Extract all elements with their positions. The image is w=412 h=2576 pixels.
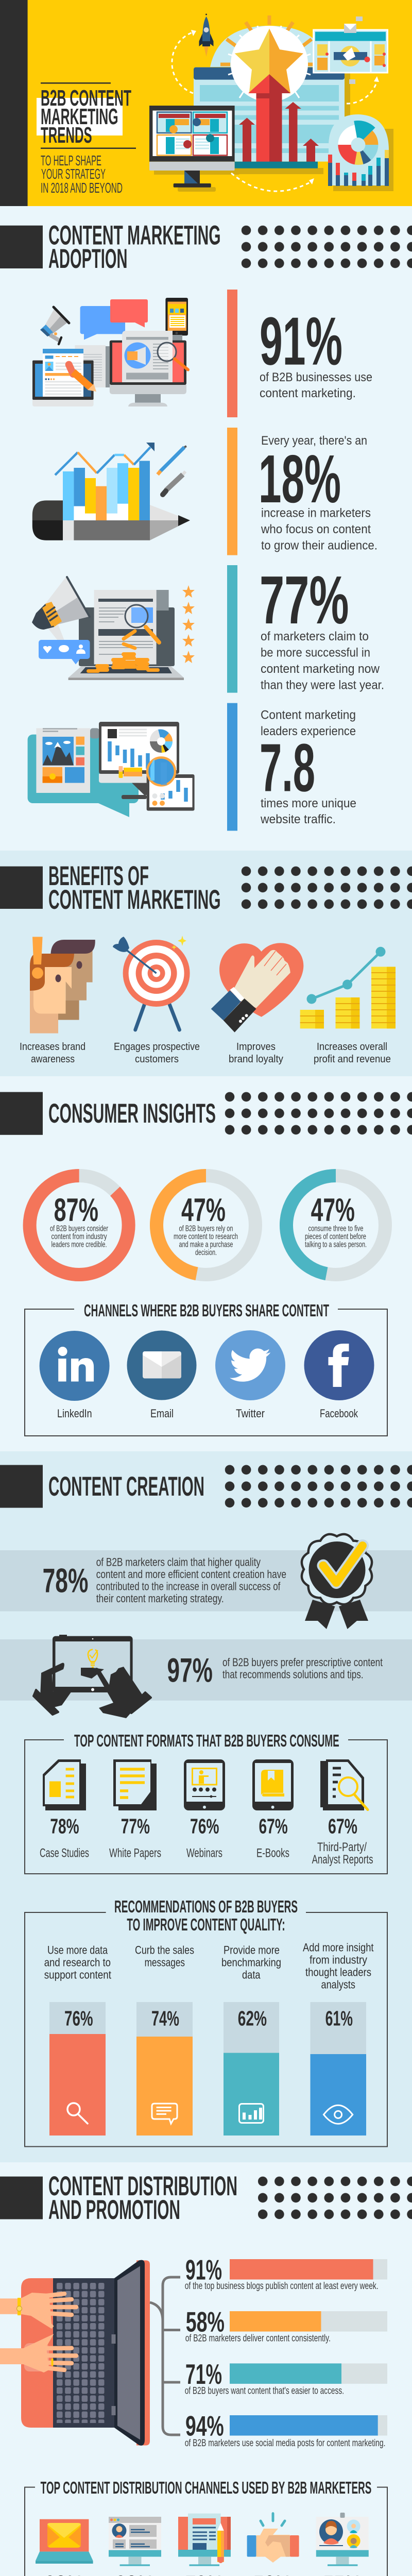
channel: social media posts xyxy=(109,2517,161,2576)
icon: target with dart xyxy=(113,936,190,1030)
format: analyst reports: Third-Party/ xyxy=(317,1840,367,1854)
stat bar: 91 percent: 91% xyxy=(185,2253,222,2285)
panel: adoption stat 7.8 xyxy=(28,703,356,831)
donut: 47 percent pieces of content: 47% xyxy=(311,1192,355,1228)
section heading: content marketing adoption xyxy=(0,221,412,274)
stat bar: 58 percent: 58% xyxy=(186,2306,225,2337)
hero illustration xyxy=(149,13,393,192)
stat text: 18% xyxy=(259,441,341,517)
format: case studies xyxy=(40,1759,89,1860)
description: of B2B marketers claim that higher quality xyxy=(96,1556,261,1568)
panel: recommendations of B2B buyers xyxy=(25,1897,387,2146)
section heading: content distribution and promotion xyxy=(0,2171,412,2225)
caption: customers xyxy=(135,1054,179,1065)
format: case studies: Case Studies xyxy=(40,1846,89,1860)
panel: engages prospective customers xyxy=(113,936,200,1065)
icon: hands on tablet xyxy=(33,1635,151,1718)
icon: Email: Email xyxy=(150,1407,174,1420)
stat value: 77% xyxy=(260,562,349,638)
recommendation: curb sales: Curb the sales xyxy=(135,1944,194,1957)
hero title block: MARKETING xyxy=(41,104,118,129)
channel: webinars and virtual events xyxy=(316,2513,369,2576)
format: e-books: E-Books xyxy=(256,1846,289,1860)
panel: 78 percent higher quality xyxy=(0,1534,412,1629)
recommendation: more data: 76% xyxy=(64,2006,93,2030)
section heading: benefits of content marketing: BENEFITS OF xyxy=(48,861,149,891)
recommendation: more data: Use more data xyxy=(47,1944,108,1957)
stat text: Every year, there's an xyxy=(261,434,367,448)
stat text xyxy=(260,708,356,826)
panel: increases overall profit and revenue xyxy=(300,947,396,1065)
panel: 97 percent prescriptive content xyxy=(0,1635,412,1718)
hero title block: TO HELP SHAPE xyxy=(41,152,101,168)
hero title block: IN 2018 AND BEYOND xyxy=(41,180,123,196)
caption: brand loyalty xyxy=(229,1054,283,1065)
stat description xyxy=(260,370,372,400)
stat description: be more successful in xyxy=(261,646,370,660)
stat bar: 94 percent xyxy=(185,2410,387,2449)
section heading: content distribution and promotion: CONTENT DISTRIBUTION xyxy=(48,2171,237,2201)
panel: top content formats xyxy=(25,1731,387,1874)
section heading: content distribution and promotion: AND PROMOTION xyxy=(48,2195,180,2225)
format: e-books: 67% xyxy=(259,1814,288,1838)
recommendation: benchmarking: benchmarking xyxy=(221,1956,281,1969)
icon: LinkedIn xyxy=(40,1331,110,1420)
donut: 47 percent pieces of content: pieces of content before xyxy=(305,1232,366,1241)
caption: awareness xyxy=(31,1054,75,1065)
panel: adoption stat 91% xyxy=(32,290,372,417)
format: analyst reports: Analyst Reports xyxy=(312,1853,373,1867)
recommendation: curb sales: messages xyxy=(145,1956,185,1969)
icon: Twitter: Twitter xyxy=(236,1407,265,1420)
illustration: laptop, megaphone and coins xyxy=(32,577,195,680)
caption: Increases brand xyxy=(20,1041,85,1053)
illustration: pencil chart xyxy=(32,443,190,540)
donut: 47 percent pieces of content: talking to a sales person. xyxy=(305,1241,367,1249)
section heading: content creation: CONTENT CREATION xyxy=(48,1471,204,1502)
panel title xyxy=(114,1897,298,1934)
donut: 47 percent pieces of content xyxy=(286,1176,385,1275)
stat text: times more unique xyxy=(261,796,356,810)
panel: top content distribution channels xyxy=(25,2478,387,2576)
stat description: of B2B businesses use xyxy=(260,370,372,384)
recommendation: more data: and research to xyxy=(44,1956,111,1969)
format: analyst reports xyxy=(312,1759,373,1867)
stat description: of marketers claim to xyxy=(261,630,369,643)
recommendation: thought leaders: 61% xyxy=(325,2006,353,2030)
section heading: consumer insights xyxy=(0,1092,412,1135)
stat description: content marketing. xyxy=(260,386,356,400)
stat bar: 58 percent xyxy=(185,2306,387,2344)
recommendation: benchmarking: 62% xyxy=(238,2006,267,2030)
icon: Facebook: Facebook xyxy=(320,1407,358,1420)
donut: 47 percent pieces of content: consume three to five xyxy=(308,1224,364,1233)
hero title block: TRENDS xyxy=(41,123,92,148)
illustration: laptop with typing hands xyxy=(0,2260,150,2446)
caption xyxy=(114,1041,200,1065)
description: that recommends solutions and tips. xyxy=(222,1668,364,1681)
description xyxy=(222,1656,383,1681)
icon: award badge with check xyxy=(302,1534,372,1629)
format: case studies: 78% xyxy=(50,1814,79,1838)
panel: adoption stat 18% xyxy=(32,428,377,555)
stat text: website traffic. xyxy=(260,812,336,826)
stat bar: 58 percent: of B2B marketers deliver content consistently. xyxy=(185,2333,331,2344)
recommendation: benchmarking: data xyxy=(242,1969,261,1981)
stat text: Content marketing xyxy=(261,708,356,722)
section heading: benefits of content marketing: CONTENT MARKETING xyxy=(48,885,221,915)
rocket icon xyxy=(199,13,213,57)
recommendation: thought leaders: from industry xyxy=(310,1954,367,1966)
icon: LinkedIn: LinkedIn xyxy=(57,1407,92,1420)
donut: 87 percent xyxy=(30,1176,129,1275)
pie and bar chart xyxy=(328,114,389,186)
recommendation: more data: support content xyxy=(44,1969,111,1981)
channel: blogs xyxy=(178,2514,231,2576)
panel: 97 percent prescriptive content: 97% xyxy=(167,1651,213,1689)
description: their content marketing strategy. xyxy=(96,1592,224,1605)
stat text: 7.8 xyxy=(260,730,315,806)
format: webinars: Webinars xyxy=(186,1846,222,1860)
channel: e-mail xyxy=(36,2519,93,2576)
icon: coin stacks with growth line xyxy=(300,947,396,1028)
stat description xyxy=(261,630,384,692)
illustration: speech bubble and analytics xyxy=(28,722,195,817)
format: white papers xyxy=(109,1759,161,1860)
donut: 87 percent: content from industry xyxy=(52,1232,107,1241)
stat value: 91% xyxy=(260,303,342,379)
recommendation: curb sales: 74% xyxy=(151,2006,179,2030)
donut: 47 percent research: of B2B buyers rely on xyxy=(179,1224,233,1233)
recommendation: benchmarking xyxy=(221,1944,281,2136)
panel: 78 percent higher quality: 78% xyxy=(43,1561,88,1599)
recommendation: curb sales xyxy=(135,1944,194,2136)
icon: Facebook xyxy=(304,1330,374,1420)
hero title block: YOUR STRATEGY xyxy=(41,166,106,182)
connector lines xyxy=(150,2277,180,2435)
donut: 87 percent: of B2B buyers consider xyxy=(50,1224,108,1233)
stat bar: 94 percent: 94% xyxy=(185,2410,224,2442)
panel: channels where B2B buyers share content xyxy=(25,1301,387,1436)
stat bar: 71 percent: of B2B buyers want content that's easier to access. xyxy=(185,2385,344,2396)
illustration: content devices xyxy=(32,298,188,406)
panel: increases brand awareness xyxy=(20,937,95,1065)
donut: 47 percent research: decision. xyxy=(195,1248,217,1257)
donut: 47 percent research xyxy=(157,1176,255,1275)
format: e-books xyxy=(252,1759,294,1860)
stat text: increase in marketers xyxy=(261,506,371,520)
stat description: content marketing now xyxy=(261,662,380,676)
channel: in-person events xyxy=(247,2514,299,2576)
description xyxy=(96,1556,286,1605)
recommendation: thought leaders: analysts xyxy=(321,1978,355,1991)
format: analyst reports: 67% xyxy=(328,1814,357,1838)
icon: two faces xyxy=(30,937,95,1033)
section heading: content creation xyxy=(0,1465,412,1508)
stat text: leaders experience xyxy=(261,724,356,738)
caption xyxy=(314,1041,391,1065)
caption: profit and revenue xyxy=(314,1054,391,1065)
recommendation: benchmarking: Provide more xyxy=(224,1944,280,1957)
icon: Email xyxy=(127,1330,197,1420)
caption xyxy=(20,1041,85,1065)
recommendation: more data xyxy=(44,1944,111,2136)
format: webinars: 76% xyxy=(190,1814,219,1838)
donut: 47 percent research: more content to research xyxy=(174,1232,238,1241)
caption xyxy=(229,1041,283,1065)
stat text xyxy=(259,434,377,552)
panel: adoption stat 77% xyxy=(32,562,384,693)
panel title: TO IMPROVE CONTENT QUALITY: xyxy=(127,1915,285,1934)
recommendation: thought leaders: thought leaders xyxy=(305,1966,371,1978)
caption: Increases overall xyxy=(317,1041,387,1053)
hands xyxy=(0,2293,76,2372)
description: contributed to the increase in overall success of xyxy=(96,1580,281,1593)
stat text: who focus on content xyxy=(261,522,371,536)
stat bar: 91 percent xyxy=(185,2253,387,2292)
description: content and more efficient content creation have xyxy=(96,1568,286,1581)
caption: Engages prospective xyxy=(114,1041,200,1053)
stat description: than they were last year. xyxy=(261,679,384,692)
stat text: to grow their audience. xyxy=(261,539,377,552)
format: white papers: 77% xyxy=(121,1814,150,1838)
analytics window xyxy=(314,16,387,84)
recommendation: thought leaders xyxy=(303,1941,374,2136)
donut: 47 percent research: and make a purchase xyxy=(179,1241,233,1249)
icon: hand on heart xyxy=(211,943,303,1032)
donut: 87 percent: leaders more credible. xyxy=(52,1241,107,1249)
icon: Twitter xyxy=(215,1330,285,1420)
caption: Improves xyxy=(236,1041,276,1053)
section heading: content marketing adoption: ADOPTION xyxy=(48,244,128,274)
hero banner xyxy=(0,0,412,206)
hero title block xyxy=(37,82,136,196)
section heading: content marketing adoption: CONTENT MARKETING xyxy=(48,221,221,251)
desktop monitor xyxy=(149,106,235,188)
section heading: benefits of content marketing xyxy=(0,861,412,915)
section heading: consumer insights: CONSUMER INSIGHTS xyxy=(48,1098,216,1129)
donut: 87 percent: 87% xyxy=(54,1192,98,1228)
recommendation: thought leaders: Add more insight xyxy=(303,1941,374,1954)
stat bar: 71 percent xyxy=(185,2358,387,2396)
hero title block: B2B CONTENT xyxy=(41,86,131,111)
donut: 47 percent research: 47% xyxy=(181,1192,226,1228)
format: webinars xyxy=(184,1759,225,1860)
format: white papers: White Papers xyxy=(109,1846,161,1860)
panel: improves brand loyalty xyxy=(211,943,303,1065)
stat bar: 71 percent: 71% xyxy=(185,2358,222,2390)
